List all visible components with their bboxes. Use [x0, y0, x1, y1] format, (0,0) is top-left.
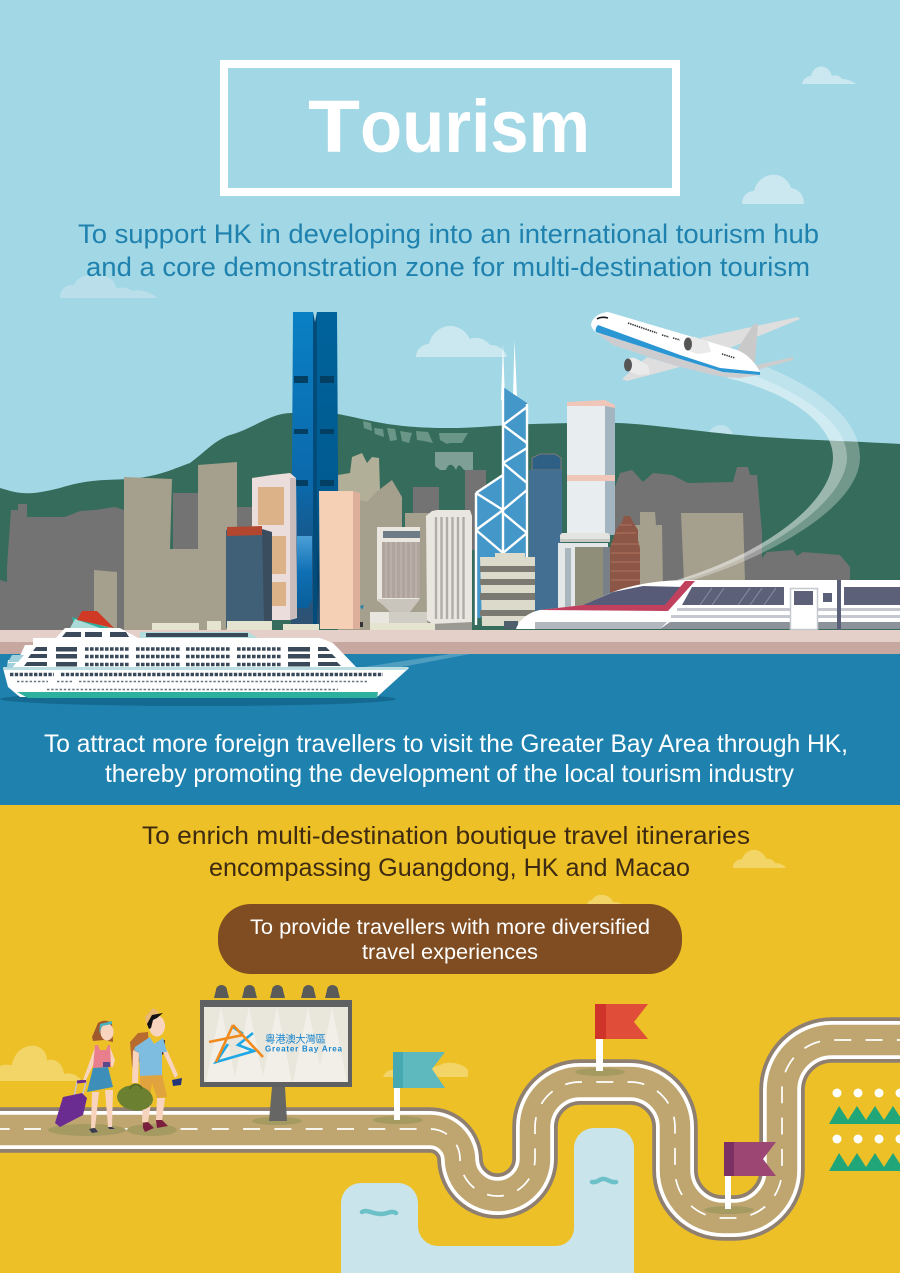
title text: ourism — [360, 85, 590, 168]
subtitle text: and a core demonstration zone for multi-destination tourism — [86, 252, 810, 282]
building: red top dark blue block — [226, 526, 272, 628]
yellow cloud: right of text — [733, 850, 786, 868]
billboard: Greater Bay Area — [265, 1044, 343, 1054]
yellow background — [0, 805, 900, 1273]
billboard — [200, 985, 352, 1121]
suitcase — [55, 1081, 87, 1127]
traveller: man — [115, 1008, 182, 1132]
water band — [0, 654, 900, 805]
water text: thereby promoting the development of the local tourism industry — [105, 760, 794, 788]
building: brown tower — [610, 516, 640, 592]
subtitle text: To support HK in developing into an international tourism hub — [78, 219, 819, 249]
waterfront pavement — [0, 630, 900, 654]
river — [341, 1128, 634, 1273]
title text: T — [308, 85, 360, 168]
trail of aircraft — [677, 367, 860, 580]
cream base blocks — [152, 621, 435, 630]
flag: purple — [724, 1142, 776, 1209]
subtitle text — [78, 219, 819, 282]
hills — [0, 413, 900, 640]
pill callout — [218, 904, 682, 974]
building: pale tower — [252, 473, 297, 620]
cloud: top right — [802, 67, 856, 84]
yellow cloud: behind pill — [587, 895, 623, 905]
intro text — [142, 822, 750, 882]
title box — [224, 64, 676, 192]
pill callout: To provide travellers with more diversified — [250, 915, 650, 939]
building: striped block — [480, 553, 535, 629]
building: Bank of China tower — [475, 340, 527, 625]
skyline: silhouette buildings — [0, 421, 850, 630]
cloud: upper right — [742, 175, 804, 204]
water text — [44, 730, 848, 788]
cloud: left — [60, 275, 158, 298]
building: peach tower — [319, 491, 364, 629]
logo mark — [209, 1025, 263, 1062]
ground shadows — [48, 1068, 754, 1214]
flag: teal — [393, 1052, 445, 1120]
lamps — [214, 985, 340, 998]
building: twin blue tower — [291, 312, 339, 625]
yellow cloud: left of billboard — [0, 1046, 82, 1081]
water text: To attract more foreign travellers to visit the Greater Bay Area through HK, — [44, 730, 848, 758]
cloud: centre — [416, 326, 507, 357]
cruise ship wake — [350, 654, 470, 672]
decoration: dots and triangles — [829, 1088, 900, 1171]
winding road — [0, 1040, 900, 1218]
aircraft — [591, 312, 800, 381]
yellow cloud: behind flag — [383, 1063, 468, 1077]
high-speed train — [516, 580, 900, 630]
intro text: To enrich multi-destination boutique travel itineraries — [142, 822, 750, 850]
building: ribbed white block — [426, 510, 472, 630]
wave: right — [592, 1179, 616, 1182]
billboard: 粵港澳大灣區 — [265, 1032, 326, 1046]
wave: left — [362, 1211, 396, 1214]
traveller: woman — [55, 1021, 115, 1133]
background: sky — [0, 0, 900, 660]
cruise ship — [0, 611, 409, 706]
building: grated block — [370, 527, 427, 623]
pill callout: travel experiences — [362, 940, 538, 964]
building: white high-rise — [558, 400, 615, 612]
cloud: behind hill — [707, 425, 734, 436]
flag: red — [595, 1004, 648, 1071]
intro text: encompassing Guangdong, HK and Macao — [209, 854, 690, 882]
building: blue block — [529, 454, 562, 620]
